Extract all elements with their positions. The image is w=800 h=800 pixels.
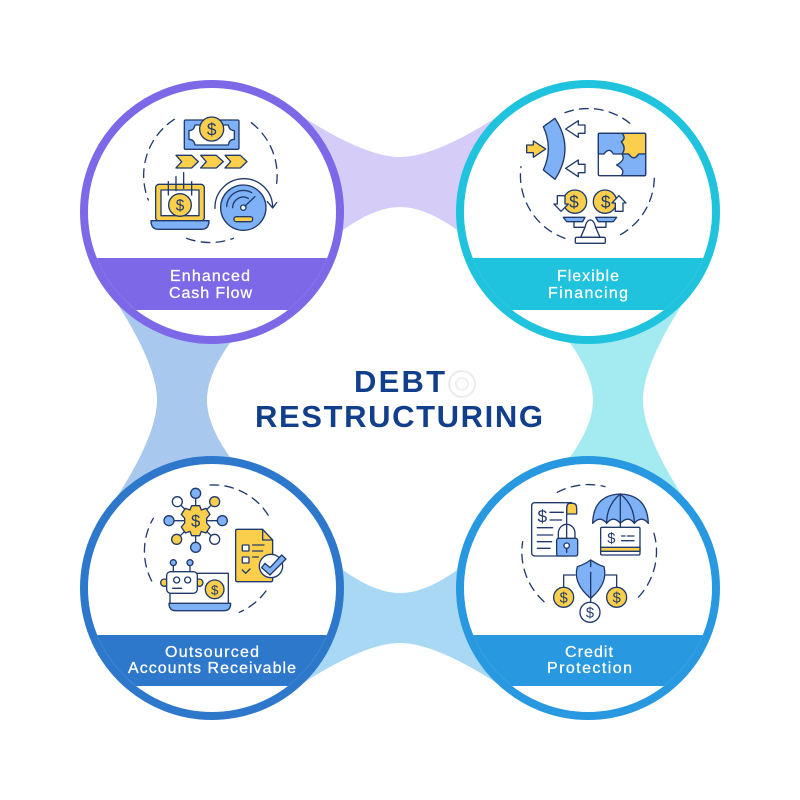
panel: outsourced accounts receivable — [80, 460, 344, 716]
label: enhanced cash flow: Cash Flow — [169, 285, 252, 302]
icon: credit protection: $ — [607, 531, 615, 547]
connector: right aqua — [560, 300, 685, 500]
label: flexible financing: Flexible — [557, 268, 619, 285]
panel: flexible financing — [456, 84, 720, 340]
icon: outsourcing: $ — [191, 512, 200, 531]
panel: credit protection — [456, 460, 720, 716]
icon: credit protection: $ — [560, 591, 568, 607]
icon: cash flow: $ — [176, 198, 185, 215]
icon: cash flow — [144, 117, 277, 243]
title — [255, 364, 543, 434]
title: RESTRUCTURING — [255, 399, 543, 434]
connector: left blue — [115, 300, 240, 500]
icon: flexible financing: $ — [569, 192, 579, 212]
icon: flexible financing: $ — [601, 192, 611, 212]
icon: outsourcing — [144, 485, 286, 612]
connector: bottom light blue — [300, 560, 500, 685]
icon: credit protection: $ — [538, 506, 548, 526]
label: flexible financing — [548, 268, 628, 302]
icon: flexible financing — [520, 109, 654, 243]
label: outsourced accounts receivable: Accounts Receivable — [128, 660, 296, 677]
infographic: debt restructuring — [80, 80, 720, 720]
label: credit protection: Protection — [547, 660, 632, 677]
label: credit protection — [547, 644, 632, 677]
label: enhanced cash flow — [169, 268, 252, 302]
title: DEBT — [354, 364, 445, 399]
icon: credit protection: $ — [613, 591, 621, 607]
icon: outsourcing: $ — [211, 582, 219, 597]
connector: top lilac — [300, 115, 500, 240]
panel: enhanced cash flow — [80, 84, 344, 340]
label: outsourced accounts receivable — [128, 644, 296, 677]
label: outsourced accounts receivable: Outsourced — [165, 644, 259, 661]
label: flexible financing: Financing — [548, 285, 628, 302]
label: enhanced cash flow: Enhanced — [170, 268, 250, 285]
label: credit protection: Credit — [565, 644, 614, 661]
icon: cash flow: $ — [207, 119, 217, 139]
icon: credit protection — [522, 485, 657, 622]
icon: credit protection: $ — [586, 606, 594, 622]
